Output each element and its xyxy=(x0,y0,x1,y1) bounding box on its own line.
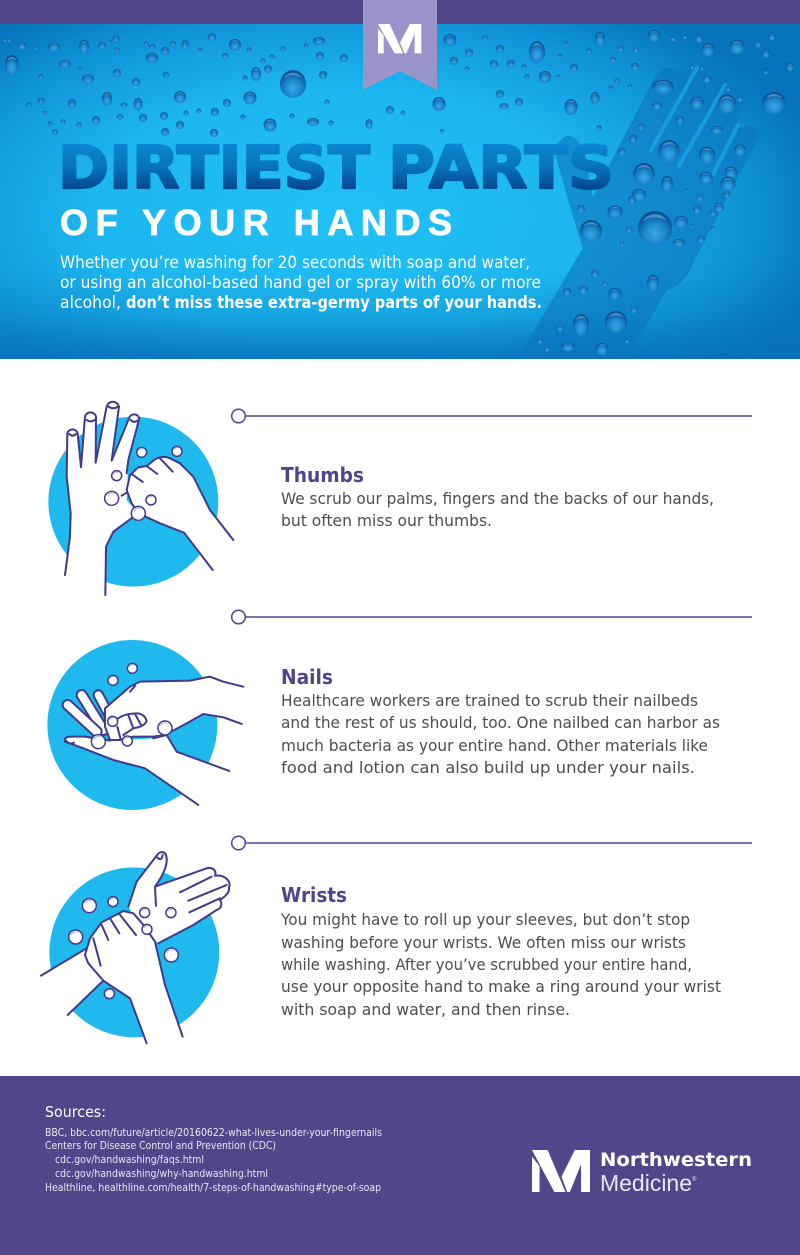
text: nails: and the rest of us should, too. One nailbed can harbor as xyxy=(281,713,720,732)
text: nails xyxy=(281,691,720,777)
text: thumbs: We scrub our palms, fingers and the backs of our hands, xyxy=(281,489,714,508)
intro paragraph: don’t miss these extra-germy parts of your hands. xyxy=(126,293,542,312)
section: wrists xyxy=(41,836,752,1043)
rule with bubble xyxy=(232,409,752,423)
northwestern medicine logo: Medicine xyxy=(600,1170,692,1196)
heading: nails: Nails xyxy=(281,665,333,689)
top purple band xyxy=(0,0,800,24)
text: wrists: washing before your wrists. We often miss our wrists xyxy=(281,933,686,952)
sources list xyxy=(45,1127,382,1194)
text: wrists: You might have to roll up your sleeves, but don’t stop xyxy=(280,910,690,929)
text: nails: food and lotion can also build up under your nails. xyxy=(281,758,695,777)
intro paragraph: or using an alcohol-based hand gel or spray with 60% or more xyxy=(60,273,541,292)
rule with bubble xyxy=(232,610,752,624)
text: nails: Healthcare workers are trained to scrub their nailbeds xyxy=(281,691,698,710)
title: dirtiest parts: DIRTIEST xyxy=(58,133,370,202)
section: nails xyxy=(47,610,752,810)
text: nails: much bacteria as your entire hand. Other materials like xyxy=(281,736,708,755)
illustration: hands scrubbing thumb xyxy=(48,402,233,595)
sources list: cdc.gov/handwashing/faqs.html xyxy=(55,1154,204,1166)
title: dirtiest parts: PARTS xyxy=(388,133,614,202)
northwestern medicine logo: ® xyxy=(692,1176,697,1183)
heading: thumbs: Thumbs xyxy=(281,463,364,487)
intro paragraph xyxy=(60,253,542,312)
footer xyxy=(0,1076,800,1255)
text: wrists xyxy=(280,910,721,1019)
ribbon logo xyxy=(363,0,437,90)
text: wrists: while washing. After you’ve scrubbed your entire hand, xyxy=(281,955,692,974)
heading: wrists: Wrists xyxy=(281,883,347,907)
sources list: cdc.gov/handwashing/why-handwashing.html xyxy=(55,1168,268,1180)
section: thumbs xyxy=(48,402,752,595)
sources list: Healthline, healthline.com/health/7-steps-of-handwashing#type-of-soap xyxy=(45,1182,381,1194)
rule with bubble xyxy=(232,836,752,850)
sources list: BBC, bbc.com/future/article/20160622-what-lives-under-your-fingernails xyxy=(45,1127,382,1139)
northwestern medicine logo: Northwestern xyxy=(600,1149,752,1171)
intro paragraph: Whether you’re washing for 20 seconds with soap and water, xyxy=(60,253,530,272)
intro paragraph: alcohol, xyxy=(60,293,121,312)
illustration: hands scrubbing nails xyxy=(47,640,243,810)
text: thumbs xyxy=(281,489,714,530)
hero banner xyxy=(0,0,800,359)
hand silhouette xyxy=(517,64,760,359)
sources heading: Sources: xyxy=(45,1103,106,1121)
text: wrists: use your opposite hand to make a ring around your wrist xyxy=(281,977,721,996)
sources list: Centers for Disease Control and Prevention (CDC) xyxy=(45,1140,276,1152)
text: wrists: with soap and water, and then rinse. xyxy=(281,1000,570,1019)
water drops xyxy=(3,30,794,355)
northwestern medicine logo xyxy=(532,1149,752,1196)
title: dirtiest parts xyxy=(58,133,614,202)
illustration: hands scrubbing wrist xyxy=(41,852,230,1043)
subtitle: of your hands: OF YOUR HANDS xyxy=(60,202,452,243)
text: thumbs: but often miss our thumbs. xyxy=(281,511,492,530)
